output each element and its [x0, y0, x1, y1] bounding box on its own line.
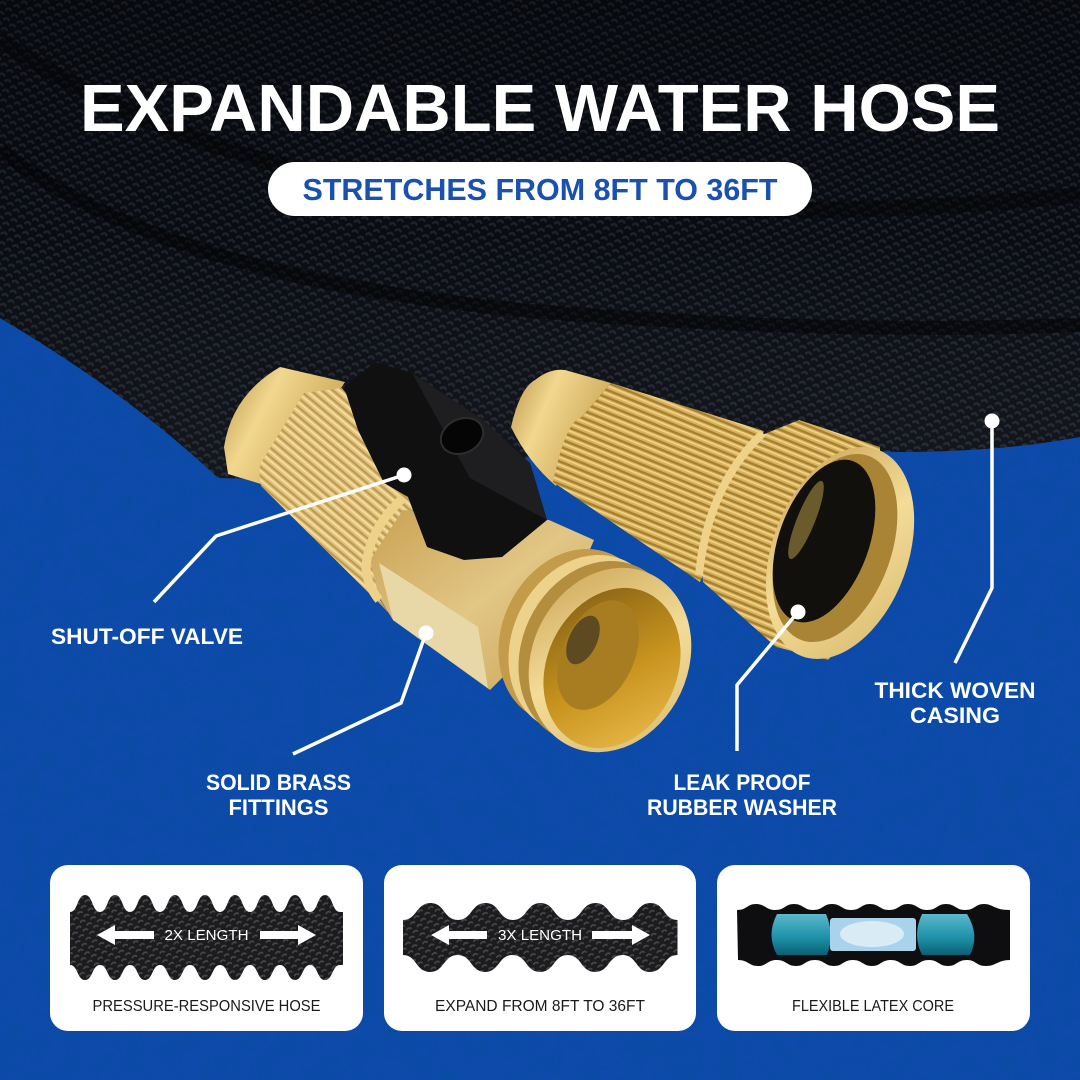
callout: leak proof rubber washer	[647, 604, 837, 820]
panel: flexible latex core: FLEXIBLE LATEX CORE	[792, 998, 954, 1015]
front knurled body	[260, 388, 420, 613]
callout: solid brass fittings	[206, 626, 434, 820]
callout: thick woven casing	[874, 414, 1036, 728]
panel: flexible latex core	[717, 865, 1030, 1031]
front collar ring	[366, 498, 403, 600]
callout: leak proof rubber washer: RUBBER WASHER	[647, 795, 837, 820]
arrows: 2x length	[97, 925, 316, 945]
rear knurled body	[553, 383, 764, 582]
black valve handle	[344, 362, 547, 560]
front fitting: shut-off valve assembly	[224, 362, 721, 779]
panel: expand from 8ft to 36ft	[384, 865, 696, 1031]
rear nut shoulder	[699, 433, 763, 575]
callout: shut-off valve	[51, 468, 412, 649]
callout: thick woven casing: CASING	[910, 703, 1000, 728]
panel: expand from 8ft to 36ft: 3X LENGTH	[498, 927, 582, 944]
panel: expand from 8ft to 36ft: EXPAND FROM 8FT TO 36FT	[435, 998, 645, 1015]
arrows: 3x length	[431, 925, 650, 945]
callout: solid brass fittings: SOLID BRASS	[206, 770, 351, 795]
rear swivel nut	[702, 420, 880, 660]
rear threaded opening	[738, 426, 942, 680]
hose sample with cutaway	[737, 904, 1010, 966]
coiled black woven hose	[0, 0, 1080, 480]
male fitting opening	[518, 565, 706, 771]
subtitle pill: STRETCHES FROM 8FT TO 36FT	[302, 172, 778, 207]
translucent water section	[830, 918, 916, 951]
male thread rings	[471, 524, 707, 769]
rear plain brass cap	[511, 370, 611, 486]
callout: leak proof rubber washer: LEAK PROOF	[674, 770, 810, 795]
hex lower facet	[379, 563, 488, 688]
male rim	[499, 541, 721, 779]
handle screw	[435, 411, 489, 461]
callout: thick woven casing: THICK WOVEN	[874, 678, 1036, 703]
title: EXPANDABLE WATER HOSE	[80, 71, 1000, 146]
panel: pressure-responsive hose	[50, 865, 363, 1031]
blue latex core sleeve	[772, 914, 831, 955]
callout: solid brass fittings: FITTINGS	[228, 795, 328, 820]
panel: pressure-responsive hose: 2X LENGTH	[164, 927, 248, 944]
hose sample 3x	[403, 903, 678, 972]
hose sample 2x	[70, 895, 343, 980]
rear fitting: female brass connector	[511, 370, 942, 680]
front plain brass cap	[224, 367, 345, 484]
callout: shut-off valve: SHUT-OFF VALVE	[51, 624, 243, 649]
brass hex valve body	[370, 510, 594, 690]
panel: pressure-responsive hose: PRESSURE-RESPONSIVE HOSE	[92, 998, 320, 1015]
subtitle pill	[268, 162, 812, 216]
